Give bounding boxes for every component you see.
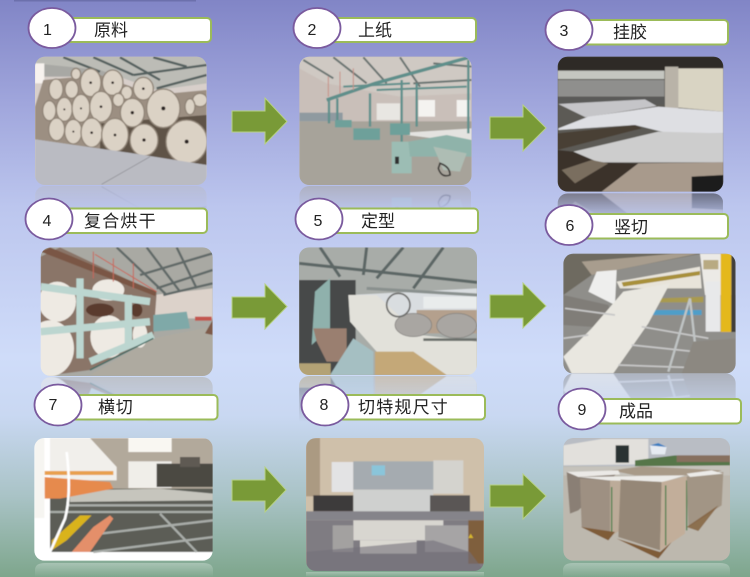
arrow 8 to 9 xyxy=(490,474,546,519)
photo: lengthwise cutting xyxy=(562,252,737,375)
step 7 label: 7 xyxy=(49,397,58,414)
step 6 label xyxy=(546,205,728,245)
step 6 label: 6 xyxy=(566,218,575,235)
step 5 label xyxy=(296,198,478,240)
step 6 label: 竖切 xyxy=(614,218,648,237)
step 9 label xyxy=(558,388,741,430)
arrow 2 to 3 xyxy=(490,105,546,151)
photo: shaping xyxy=(298,247,478,377)
step 4 label: 复合烘干 xyxy=(84,212,157,231)
photo: paper feeding line xyxy=(298,55,473,187)
step 9 label: 成品 xyxy=(619,402,653,421)
step 4 label xyxy=(26,198,207,240)
step 3 label xyxy=(546,10,728,50)
step 3 label: 3 xyxy=(560,23,569,40)
step 2 label: 上纸 xyxy=(358,21,392,40)
photo: laminating and drying machine xyxy=(26,247,214,377)
step 7 label xyxy=(34,384,218,426)
arrow 1 to 2 xyxy=(232,98,287,144)
photo: glue application xyxy=(557,55,725,193)
step 1 label: 原料 xyxy=(94,21,128,40)
step 1 label xyxy=(28,8,211,48)
step 2 label xyxy=(294,8,476,48)
step 4 label: 4 xyxy=(43,213,52,230)
step 5 label: 定型 xyxy=(361,212,395,231)
arrow 4 to 5 xyxy=(232,284,287,329)
step 5 label: 5 xyxy=(314,213,323,230)
step 2 label: 2 xyxy=(308,22,317,39)
arrow 7 to 8 xyxy=(232,467,286,512)
step 7 label: 横切 xyxy=(98,398,134,417)
step 9 label: 9 xyxy=(578,402,587,419)
step 8 label: 8 xyxy=(320,397,329,414)
step 1 label: 1 xyxy=(43,22,52,39)
photo: cutting machine for special sizes xyxy=(305,437,485,572)
arrow 5 to 6 xyxy=(490,283,546,328)
photo: raw material paper rolls xyxy=(33,55,208,187)
photo: cross cutting xyxy=(33,437,213,562)
step 8 label xyxy=(302,384,485,426)
step 8 label: 切特规尺寸 xyxy=(358,398,449,417)
step 3 label: 挂胶 xyxy=(613,23,647,42)
photo: finished board stacks xyxy=(562,437,732,562)
